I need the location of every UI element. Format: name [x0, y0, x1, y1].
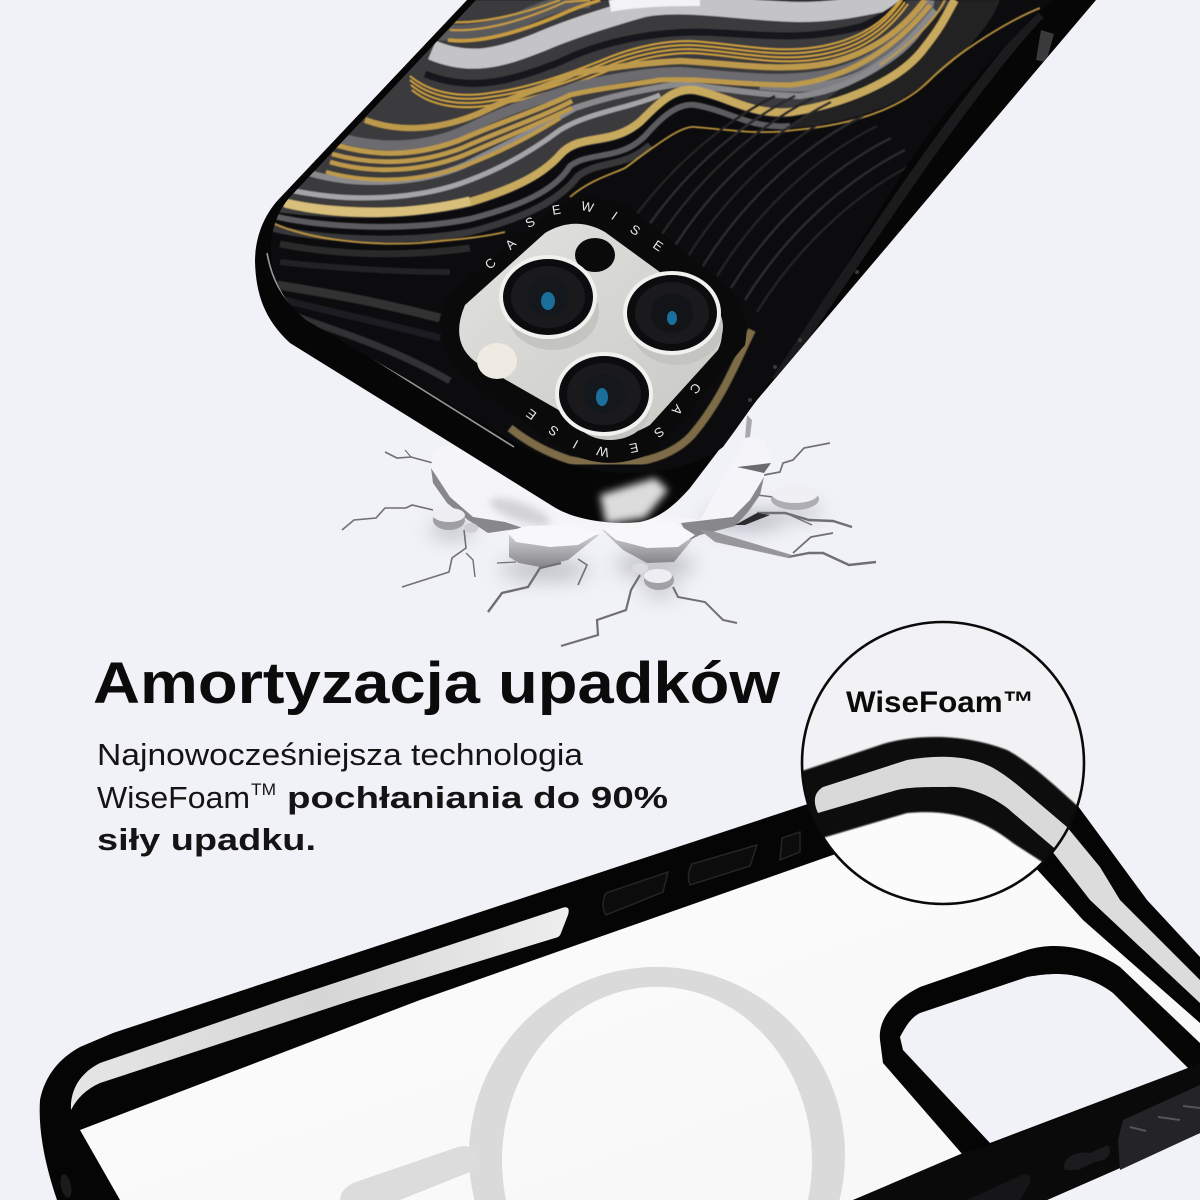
debris slab left — [507, 525, 599, 567]
volume button lower — [967, 1174, 1031, 1200]
rail patch with streaks — [1118, 1085, 1200, 1170]
clear case with black bumper — [40, 760, 1200, 1200]
brand text bottom — [515, 382, 695, 447]
bezel dots — [748, 270, 859, 402]
flash hole — [575, 238, 615, 272]
marble artwork — [272, 0, 1040, 464]
flash — [477, 343, 517, 379]
grey upper field — [262, 0, 955, 218]
crack wedges — [431, 468, 523, 533]
body copy: WiseFoam — [97, 780, 250, 815]
case body — [255, 0, 1096, 523]
gold top-left lines — [448, 0, 600, 41]
brand label upper: CASEWISE — [486, 201, 664, 268]
upper light bands — [432, 0, 900, 59]
gold edge near camera — [510, 330, 752, 464]
mid grey stripes — [290, 5, 935, 198]
brand label lower: CASEWISE — [526, 384, 700, 458]
crack lines — [342, 443, 876, 646]
body copy: TM — [251, 780, 276, 799]
air gap right — [1020, 800, 1200, 1003]
side rail — [853, 1063, 1200, 1200]
magnified bumper corner — [802, 737, 1084, 904]
body copy — [97, 737, 668, 857]
lens bottom — [555, 352, 653, 436]
shadow beside phone — [487, 493, 553, 531]
camera cutout frame — [880, 946, 1200, 1155]
debris slab centre — [602, 520, 695, 563]
body copy: Najnowocześniejsza technologia — [97, 737, 584, 772]
main gold leaf vein — [268, 0, 955, 212]
gold fan lines — [326, 0, 945, 180]
lens right — [623, 271, 721, 355]
magnetic ring — [469, 967, 845, 1200]
small rocks — [433, 485, 819, 590]
left port — [59, 1173, 73, 1199]
clear back panel — [80, 815, 1200, 1200]
camera island — [459, 201, 746, 463]
camera window — [459, 224, 722, 436]
dark flow lines — [615, 96, 917, 312]
cracked floor impact — [342, 415, 876, 646]
magnifier label: WiseFoam™ — [846, 686, 1034, 719]
side buttons — [603, 832, 800, 915]
phone with marble case — [255, 0, 1096, 523]
bumper silhouette — [40, 760, 1200, 1200]
body copy: pochłaniania do 90% — [287, 780, 668, 815]
white raised slabs — [431, 437, 771, 534]
magnetic pill — [340, 1146, 480, 1200]
camera cutout window — [900, 974, 1188, 1143]
lens barrels — [507, 274, 723, 440]
thin gold veins — [273, 8, 1040, 244]
air gap left — [71, 907, 569, 1110]
gold thin stacked lines — [410, 0, 908, 107]
lens top-left — [499, 255, 597, 339]
lower grey bands — [272, 101, 791, 384]
bumper highlight — [267, 14, 1054, 524]
body copy: siły upadku. — [97, 822, 316, 857]
heading: Amortyzacja upadków — [93, 651, 781, 716]
brand text top — [490, 211, 668, 270]
mute switch — [1064, 1145, 1110, 1170]
soft shadows under debris — [430, 506, 822, 596]
magnifier circle — [802, 622, 1084, 904]
